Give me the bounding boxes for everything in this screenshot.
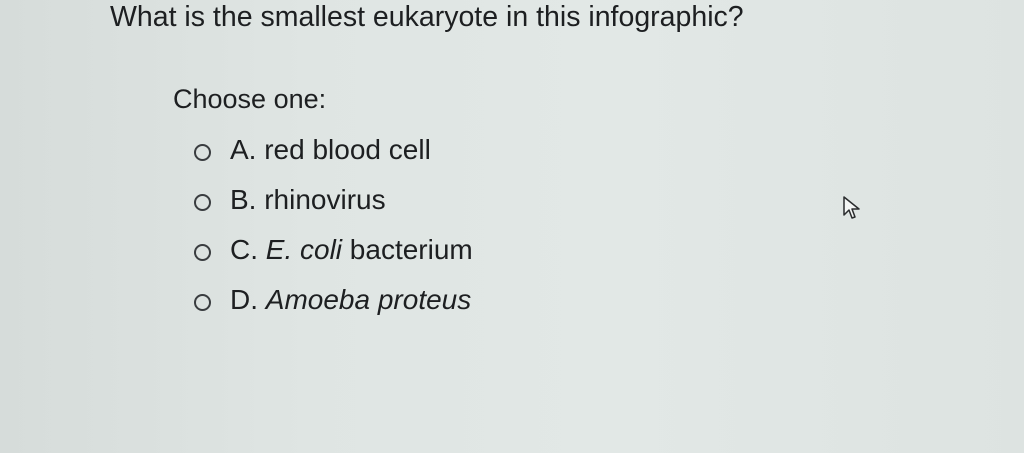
icon: mouse cursor [843, 196, 860, 219]
option A [194, 134, 431, 165]
radio A [194, 144, 211, 161]
option D [194, 284, 471, 315]
text A: A. red blood cell [230, 134, 431, 165]
option C [194, 234, 473, 265]
radio B [194, 194, 211, 211]
radio D [194, 294, 211, 311]
title: What is the smallest eukaryote in this infographic? [110, 1, 744, 33]
text B: B. rhinovirus [230, 184, 386, 215]
text C: C. E. coli bacterium [230, 234, 473, 265]
prompt: choose one: Choose one: [173, 84, 326, 114]
option B [194, 184, 386, 215]
text D: D. Amoeba proteus [230, 284, 471, 315]
radio C [194, 244, 211, 261]
